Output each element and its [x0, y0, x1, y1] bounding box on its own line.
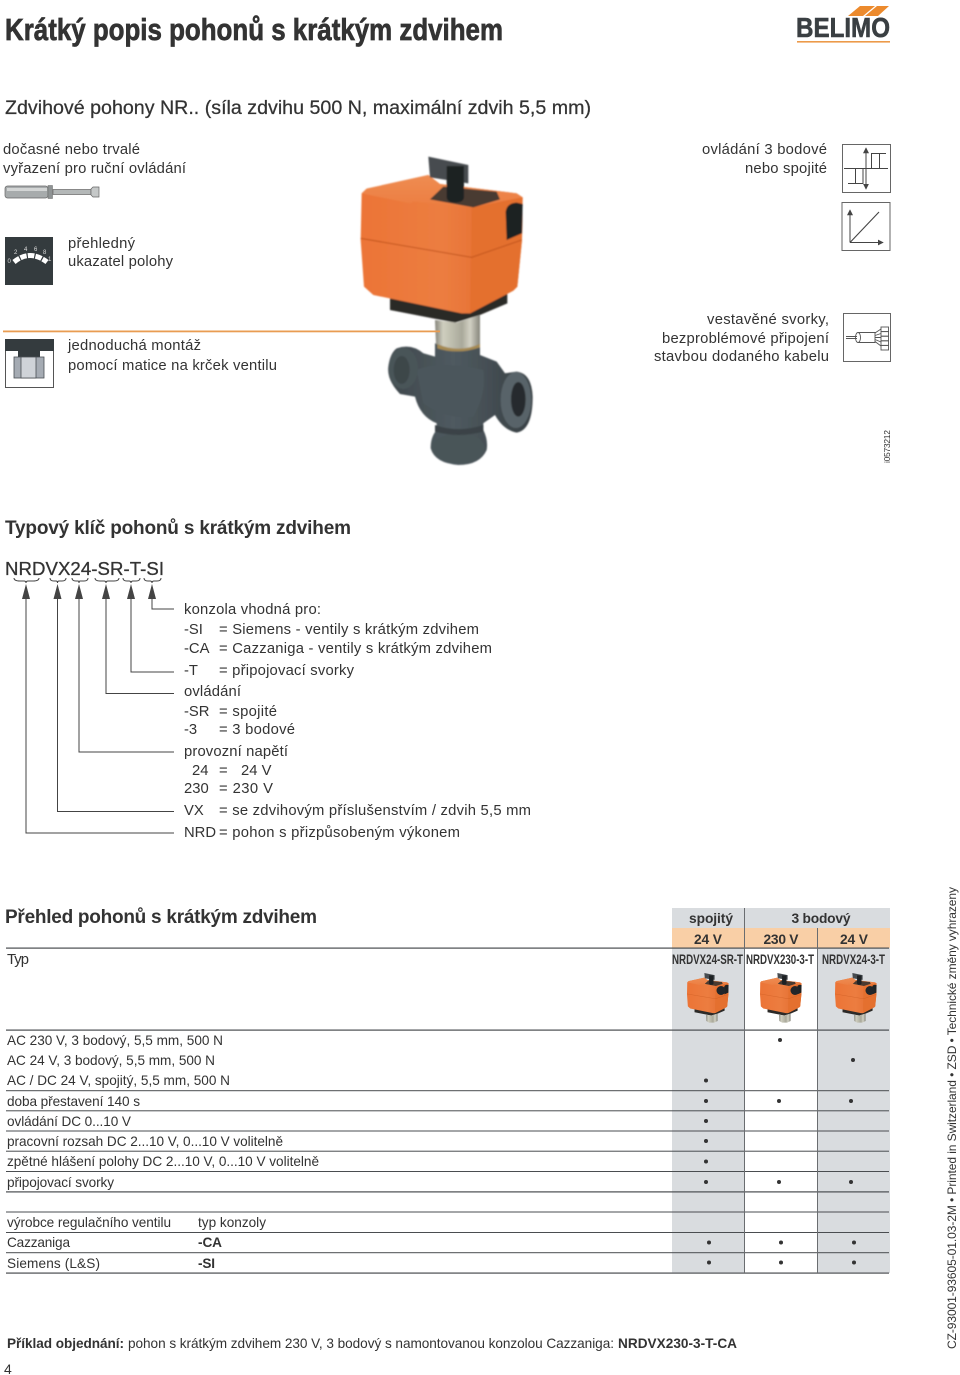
table header labels: [672, 911, 886, 967]
side note: CZ-93001-93605-01.03-2M • Printed in Switzerland • ZSD • Technické změny vyhrazeny: [945, 887, 959, 1349]
table row labels: zpětné hlášení polohy DC 2...10 V, 0...10 V volitelně: [7, 1154, 319, 1169]
table row labels: Siemens (L&S): [7, 1256, 100, 1271]
photo: actuator with valve: [361, 157, 533, 465]
table row labels: výrobce regulačního ventilu: [7, 1215, 171, 1230]
diagram: type key brackets and arrows: [14, 578, 174, 833]
heading: overview: Přehled pohonů s krátkým zdvihem: [5, 907, 317, 928]
table: overview: [6, 908, 890, 1274]
icon: position indicator dial: 2: [14, 250, 18, 256]
table header labels: 230 V: [764, 932, 799, 947]
icon: position indicator dial: 8: [43, 250, 47, 256]
table row labels: typ konzoly: [198, 1215, 266, 1230]
order example: Příklad objednání:: [7, 1336, 124, 1351]
icon: terminal cable: [844, 314, 890, 362]
table row labels: AC 230 V, 3 bodový, 5,5 mm, 500 N: [7, 1033, 223, 1048]
text block: type key legend: =: [219, 763, 228, 779]
callout: control type: nebo spojité: [745, 161, 827, 177]
image id: i0573212: [882, 430, 892, 463]
callout: manual override: [3, 142, 187, 177]
icon: position indicator dial: 1: [48, 257, 52, 263]
callout: terminals: bezproblémové připojení: [662, 331, 830, 347]
text block: type key legend: NRD: [184, 825, 216, 841]
table header labels: spojitý: [689, 911, 733, 926]
text block: type key legend: -3: [184, 722, 197, 738]
order example: pohon s krátkým zdvihem 230 V, 3 bodový s namontovanou konzolou Cazzaniga:: [128, 1336, 614, 1351]
mini photo: actuator 3: [835, 973, 877, 1023]
text block: type key legend: = 3 bodové: [219, 722, 295, 738]
table row labels: [7, 1033, 319, 1271]
callout: easy mounting: [67, 338, 277, 374]
callout: manual override: dočasné nebo trvalé: [3, 142, 140, 158]
table row labels: doba přestavení 140 s: [7, 1094, 140, 1109]
text block: type key legend: ovládání: [184, 684, 242, 700]
text block: type key legend: 24 V: [241, 763, 272, 779]
text block: type key legend: provozní napětí: [184, 744, 289, 760]
text block: type key legend: = Cazzaniga - ventily s krátkým zdvihem: [219, 641, 492, 657]
icon: modulating control: [842, 202, 890, 250]
subtitle: Zdvihové pohony NR.. (síla zdvihu 500 N, maximální zdvih 5,5 mm): [5, 97, 591, 119]
icon: nut mounting: [5, 339, 54, 388]
icon: position indicator dial: 4: [24, 247, 28, 253]
type code: NRDVX24-SR-T-SI: [5, 558, 164, 579]
table row labels: AC 24 V, 3 bodový, 5,5 mm, 500 N: [7, 1053, 215, 1068]
icon: three-point control: [842, 144, 890, 192]
table header labels: NRDVX24-3-T: [822, 952, 886, 967]
table dots: [704, 1038, 856, 1264]
callout: position indicator: přehledný: [68, 236, 136, 252]
icon: position indicator dial: [5, 237, 53, 285]
leader line: orange: [3, 330, 440, 332]
mini photo: actuator 2: [760, 973, 802, 1023]
callout: control type: ovládání 3 bodové: [702, 142, 827, 158]
table row labels: ovládání DC 0...10 V: [7, 1114, 131, 1129]
table column backgrounds: [672, 908, 890, 1273]
icon: position indicator dial: 6: [34, 247, 38, 253]
callout: terminals: stavbou dodaného kabelu: [654, 349, 829, 365]
table row labels: Cazzaniga: [7, 1235, 70, 1250]
row label: type: Typ: [7, 952, 29, 968]
table row labels: -SI: [198, 1256, 215, 1271]
text block: type key legend: -SR: [184, 704, 209, 720]
table grid lines: [6, 908, 889, 1274]
title: Krátký popis pohonů s krátkým zdvihem: [5, 12, 503, 47]
heading: type key: Typový klíč pohonů s krátkým zdvihem: [5, 518, 351, 539]
text block: type key legend: -CA: [184, 641, 210, 657]
text block: type key legend: -SI: [184, 622, 203, 638]
callout: easy mounting: pomocí matice na krček ventilu: [68, 358, 277, 374]
text block: type key legend: = připojovací svorky: [219, 663, 355, 679]
text block: type key legend: = 230 V: [219, 781, 273, 797]
table header labels: 24 V: [694, 932, 723, 947]
order example: [7, 1336, 737, 1351]
table row labels: pracovní rozsah DC 2...10 V, 0...10 V volitelně: [7, 1134, 283, 1149]
table header labels: 24 V: [840, 932, 869, 947]
callout: terminals: [654, 312, 830, 365]
text block: type key legend: -T: [184, 663, 198, 679]
text block: type key legend: = spojité: [219, 704, 277, 720]
text block: type key legend: 24: [192, 763, 208, 779]
callout: position indicator: [68, 236, 174, 270]
callout: control type: [702, 142, 827, 177]
icon: position indicator dial: 0: [8, 259, 12, 265]
table header labels: 3 bodový: [792, 911, 851, 926]
table header labels: NRDVX24-SR-T: [672, 952, 744, 967]
text block: type key legend: VX: [184, 803, 204, 819]
text block: type key legend: konzola vhodná pro:: [184, 602, 321, 618]
table row labels: AC / DC 24 V, spojitý, 5,5 mm, 500 N: [7, 1073, 230, 1088]
text block: type key legend: = pohon s přizpůsobeným výkonem: [219, 825, 460, 841]
mini photo: actuator 1: [687, 973, 729, 1023]
callout: manual override: vyřazení pro ruční ovládání: [3, 161, 187, 177]
table row labels: připojovací svorky: [7, 1175, 114, 1190]
text block: type key legend: 230: [184, 781, 209, 797]
text block: type key legend: = se zdvihovým příslušenstvím / zdvih 5,5 mm: [219, 803, 531, 819]
table row labels: -CA: [198, 1235, 222, 1250]
order example: NRDVX230-3-T-CA: [618, 1336, 737, 1351]
callout: easy mounting: jednoduchá montáž: [67, 338, 201, 354]
callout: position indicator: ukazatel polohy: [68, 254, 174, 270]
callout: terminals: vestavěné svorky,: [707, 312, 829, 328]
logo: Belimo: BELIMO: [796, 12, 890, 43]
icon: screwdriver: [5, 186, 99, 198]
table header labels: NRDVX230-3-T: [746, 952, 815, 967]
text block: type key legend: = Siemens - ventily s krátkým zdvihem: [219, 622, 479, 638]
text block: type key legend: [184, 602, 531, 841]
